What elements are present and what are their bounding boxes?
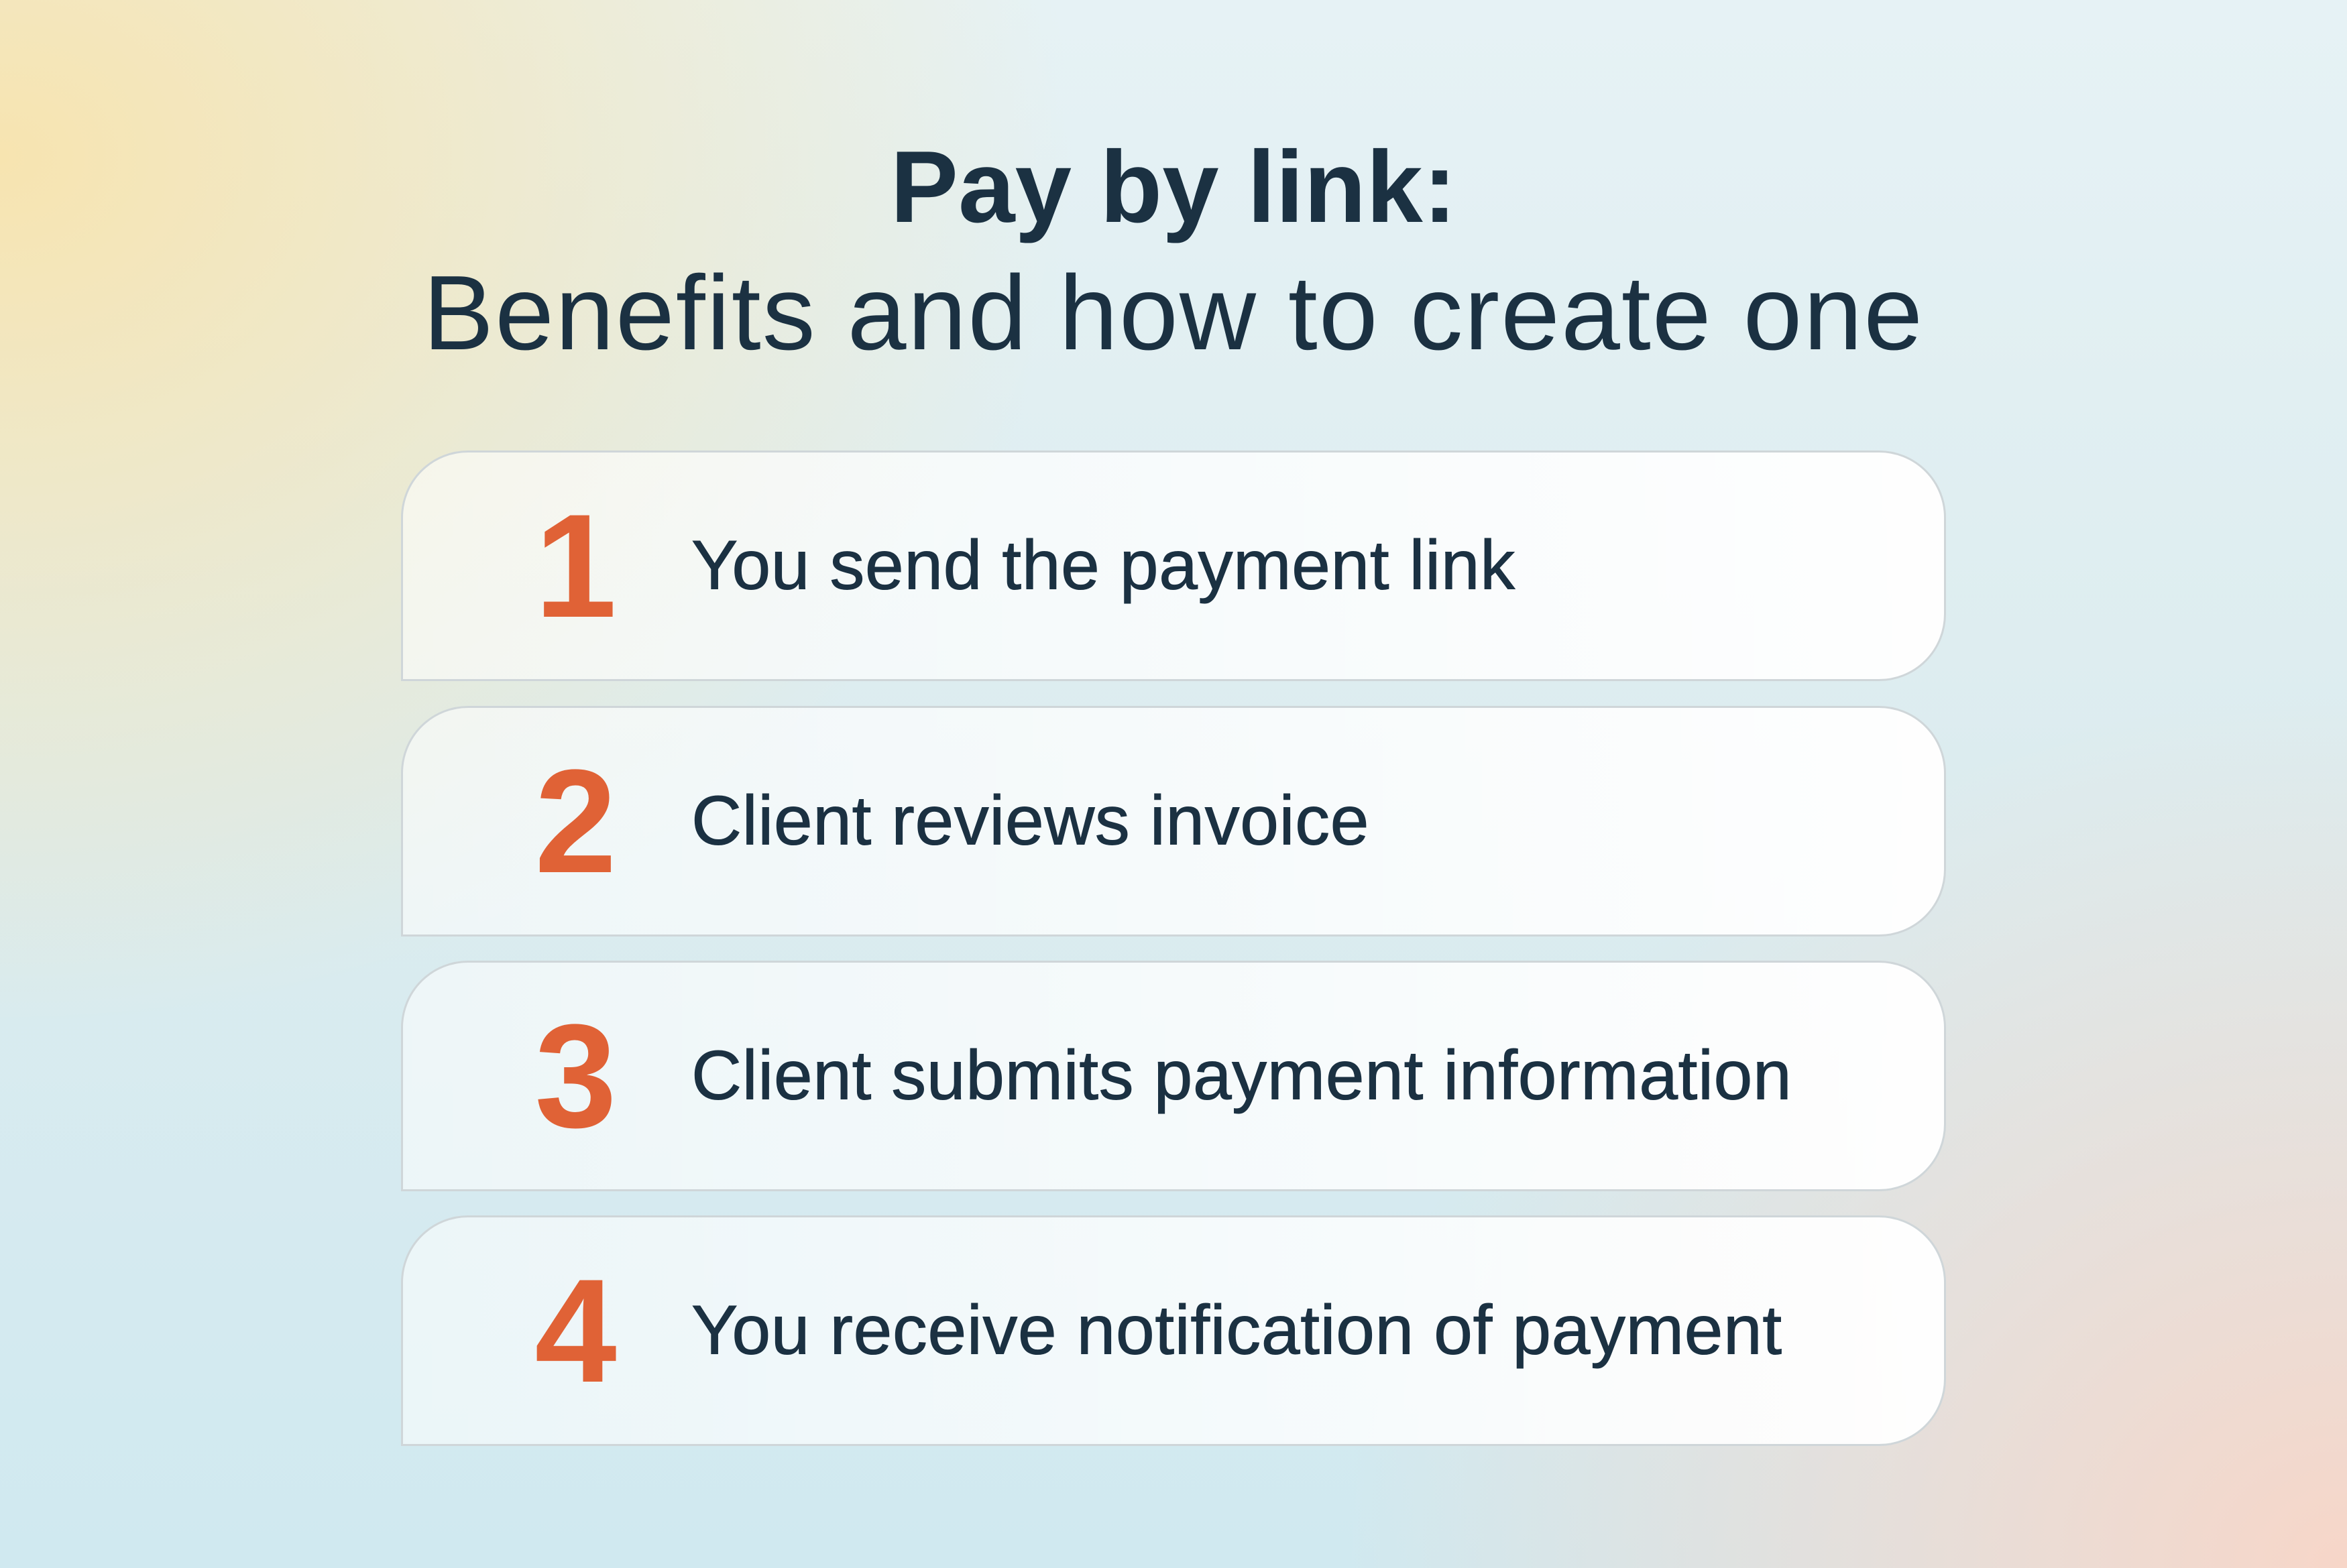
number 4: 4	[534, 1248, 617, 1413]
number 2: 2	[534, 739, 617, 904]
step 4 text: You receive notification of payment	[691, 1291, 1782, 1369]
number 1: 1	[534, 483, 617, 648]
number 3: 3	[534, 993, 617, 1158]
step 3 text: Client submits payment information	[691, 1036, 1792, 1114]
step 1 text: You send the payment link	[691, 527, 1515, 605]
step card 2	[401, 706, 1946, 937]
step card 1	[401, 450, 1946, 681]
step card 4	[401, 1215, 1946, 1446]
step card 3	[401, 961, 1946, 1191]
title: Pay by link:	[891, 130, 1456, 244]
step 2 text: Client reviews invoice	[691, 782, 1369, 859]
subtitle: Benefits and how to create one	[423, 254, 1924, 372]
